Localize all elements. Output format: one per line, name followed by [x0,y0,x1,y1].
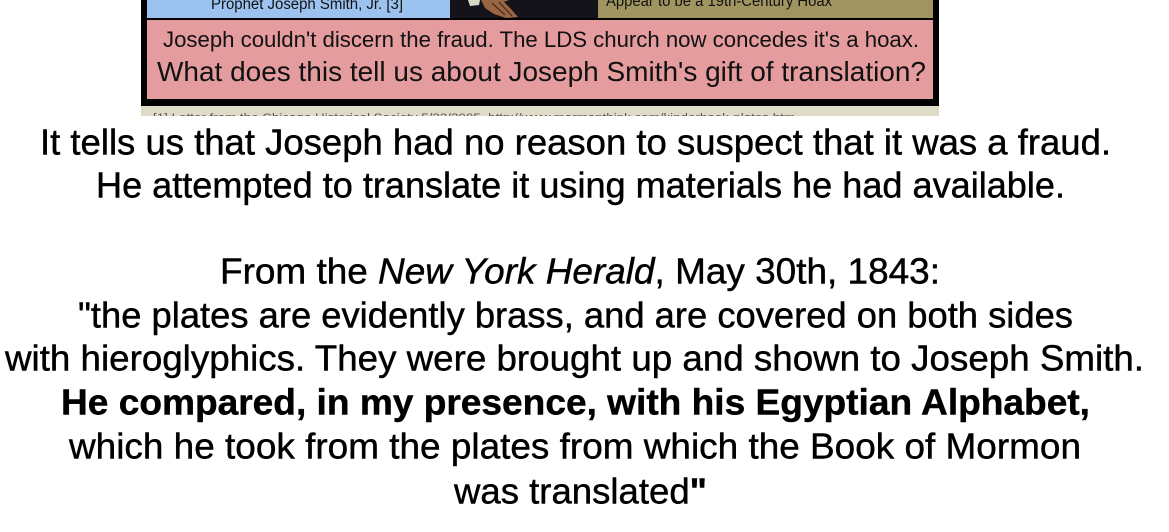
slide image: cropped slide [141,0,939,124]
footnote strip: [1] Letter from the Chicago Historical Society 5/23/2005, http://www.mormonthink.com/kinderhook-plates.htm [153,112,795,124]
panel: blue prophet caption [147,0,450,18]
text block: response: He attempted to translate it using materials he had available. [96,164,1065,206]
panel: pink conclusion: Joseph couldn't discern the fraud. The LDS church now concedes it's a hoax. [163,27,919,52]
text block: New York Herald quotation: He compared, in my presence, with his Egyptian Alphabet, [61,382,1090,422]
panel: pink conclusion [147,20,933,99]
text block: response [40,122,1111,206]
text block: response: It tells us that Joseph had no reason to suspect that it was a fraud. [40,122,1111,162]
text block: New York Herald quotation: with hieroglyphics. They were brought up and shown to Joseph Smith. [4,338,1144,378]
text block: New York Herald quotation [4,250,1144,512]
text block: New York Herald quotation: was translated" [453,470,707,512]
panel: olive hoax caption [598,0,933,18]
text block: New York Herald quotation: From the New York Herald, May 30th, 1843: [220,250,940,292]
panel: pink conclusion: What does this tell us about Joseph Smith's gift of translation? [157,56,926,87]
text block: New York Herald quotation: which he took from the plates from which the Book of Mormon [68,426,1081,466]
text block: New York Herald quotation: "the plates are evidently brass, and are covered on both sides [78,294,1073,336]
portrait: hand on dark coat [450,0,598,18]
